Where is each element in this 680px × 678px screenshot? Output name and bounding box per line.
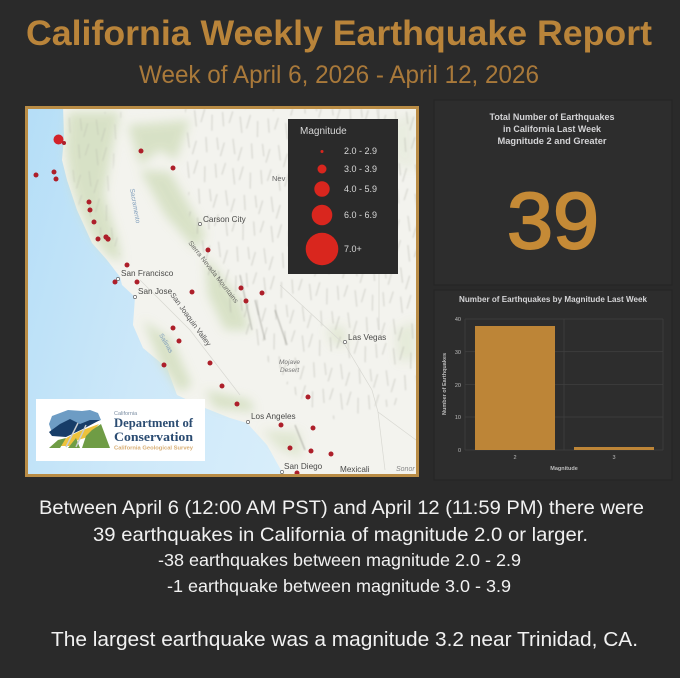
panel: total earthquakes: in California Last Week bbox=[503, 124, 602, 134]
panel: total earthquakes bbox=[434, 100, 672, 285]
logo: Department of Conservation bbox=[36, 399, 205, 461]
map legend: magnitude: 7.0+ bbox=[344, 244, 362, 254]
panel: bar chart of earthquakes by magnitude: Number of Earthquakes by Magnitude Last Week bbox=[459, 294, 647, 304]
map legend: magnitude: 6.0 - 6.9 bbox=[344, 210, 377, 220]
panel: total earthquakes: Total Number of Earthquakes bbox=[490, 112, 614, 122]
summary text: -1 earthquake between magnitude 3.0 - 3.9 bbox=[167, 576, 511, 596]
panel: bar chart of earthquakes by magnitude: 20 bbox=[455, 383, 461, 389]
panel: earthquake map: San Francisco bbox=[121, 269, 174, 278]
map legend: magnitude bbox=[288, 119, 398, 274]
panel: earthquake map: Mojave bbox=[279, 359, 300, 366]
panel: bar chart of earthquakes by magnitude: 10 bbox=[455, 415, 461, 421]
icon: bear logo bbox=[49, 410, 110, 448]
panel: bar chart of earthquakes by magnitude: 2 bbox=[513, 455, 517, 461]
panel: bar chart of earthquakes by magnitude: 3 bbox=[612, 455, 616, 461]
big number 39: 39 bbox=[507, 176, 599, 265]
panel: bar chart of earthquakes by magnitude: Number of Earthquakes bbox=[442, 353, 448, 415]
logo: Department of Conservation: Conservation bbox=[114, 430, 193, 444]
map legend: magnitude: 3.0 - 3.9 bbox=[344, 164, 377, 174]
panel: earthquake map: Carson City bbox=[203, 215, 247, 224]
panel: bar chart of earthquakes by magnitude: 0 bbox=[458, 448, 461, 454]
panel: earthquake map: Salinas bbox=[157, 332, 174, 355]
panel: bar chart of earthquakes by magnitude: Magnitude bbox=[550, 466, 578, 472]
panel: earthquake map: Sierra Nevada Mountains bbox=[186, 240, 240, 305]
panel: earthquake map: Sonor bbox=[396, 466, 415, 473]
panel: earthquake map: Mexicali bbox=[340, 465, 370, 474]
logo: Department of Conservation: Department of bbox=[114, 416, 194, 430]
bar: magnitude 3 bbox=[574, 447, 654, 450]
panel: earthquake map: San Diego bbox=[284, 462, 323, 471]
panel: total earthquakes: Magnitude 2 and Greater bbox=[498, 136, 607, 146]
panel: bar chart of earthquakes by magnitude bbox=[434, 290, 672, 480]
earthquake markers bbox=[34, 134, 334, 476]
panel: bar chart of earthquakes by magnitude: 40 bbox=[455, 317, 461, 323]
panel: earthquake map: Sacramento bbox=[128, 188, 141, 224]
summary text: 39 earthquakes in California of magnitude 2.0 or larger. bbox=[93, 524, 588, 546]
panel: earthquake map: Nev bbox=[272, 174, 286, 183]
logo: Department of Conservation: California bbox=[114, 411, 138, 417]
summary text bbox=[39, 497, 644, 651]
panel: bar chart of earthquakes by magnitude: 30 bbox=[455, 350, 461, 356]
panel: earthquake map: San Jose bbox=[138, 287, 173, 296]
map legend: magnitude: 4.0 - 5.9 bbox=[344, 184, 377, 194]
summary text: -38 earthquakes between magnitude 2.0 - 2.9 bbox=[158, 550, 521, 570]
panel: earthquake map: Los Angeles bbox=[251, 412, 296, 421]
summary text: The largest earthquake was a magnitude 3.2 near Trinidad, CA. bbox=[51, 628, 638, 651]
bar: magnitude 2 bbox=[475, 326, 555, 450]
panel: earthquake map: Desert bbox=[280, 367, 300, 374]
panel: earthquake map: Las Vegas bbox=[348, 333, 386, 342]
panel: earthquake map: San Joaquin Valley bbox=[168, 291, 213, 348]
subtitle: date range: Week of April 6, 2026 - April 12, 2026 bbox=[139, 61, 539, 89]
map legend: magnitude: 2.0 - 2.9 bbox=[344, 146, 377, 156]
summary text: Between April 6 (12:00 AM PST) and April 12 (11:59 PM) there were bbox=[39, 497, 644, 519]
title: California Weekly Earthquake Report bbox=[26, 13, 652, 53]
logo: Department of Conservation: California Geological Survey bbox=[114, 446, 194, 452]
panel: earthquake map bbox=[25, 105, 420, 480]
map legend: magnitude: Magnitude bbox=[300, 126, 347, 137]
